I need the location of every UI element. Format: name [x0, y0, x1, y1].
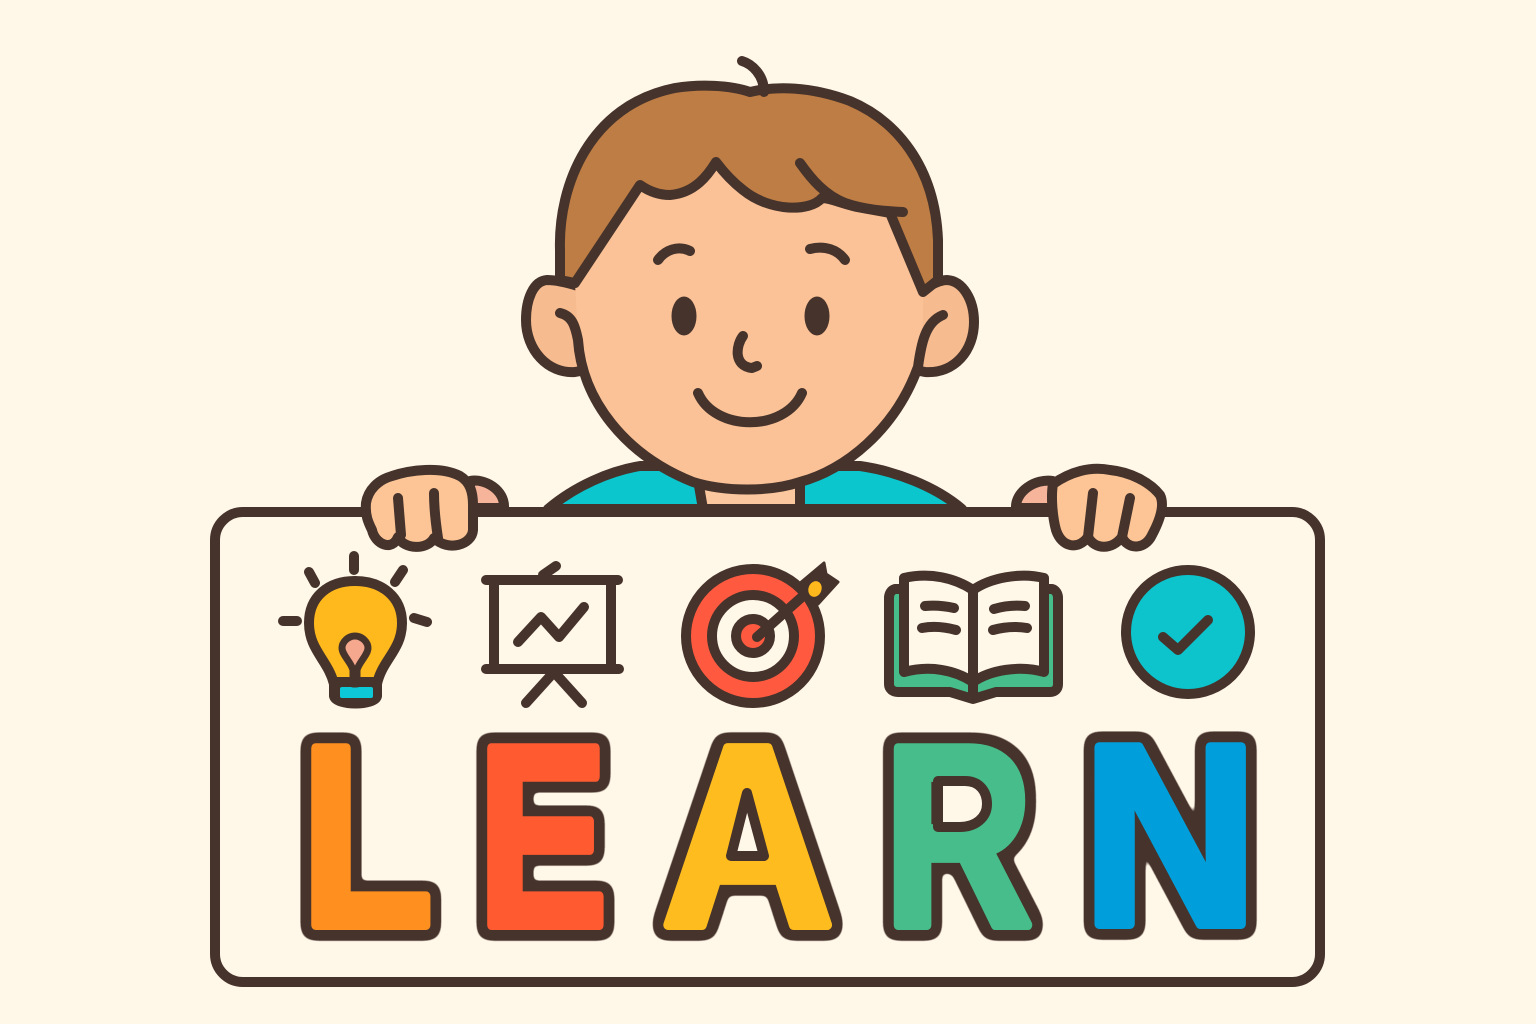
- letter N: N: [1083, 691, 1257, 979]
- icon: check circle: [1126, 570, 1250, 694]
- left eyebrow: [658, 248, 690, 260]
- R counter: [938, 781, 987, 827]
- left eye: [672, 296, 696, 336]
- icon: target with arrow: [686, 563, 838, 703]
- hair: [560, 86, 938, 292]
- letter A: A: [662, 693, 834, 980]
- letter R: R: [884, 693, 1032, 980]
- word: LEARN: [301, 691, 1257, 980]
- right eye: [804, 296, 830, 336]
- mouth: [698, 393, 802, 422]
- shirt: [548, 466, 962, 509]
- letter L: L: [301, 693, 433, 980]
- icon: light bulb: [283, 556, 427, 704]
- jaw and inner ear contour: [560, 313, 943, 490]
- letter E: E: [478, 694, 607, 980]
- nose: [738, 336, 757, 368]
- hair lock: [800, 163, 903, 212]
- hair curl: [742, 61, 764, 92]
- face: [575, 150, 923, 490]
- left hand: [366, 470, 504, 547]
- icon: open book: [889, 576, 1058, 699]
- right eyebrow: [810, 248, 845, 260]
- right ear: [915, 280, 974, 372]
- character: boy: [526, 61, 974, 509]
- left ear: [526, 280, 586, 372]
- icon: presentation board: [486, 566, 619, 703]
- sign board: [215, 512, 1320, 982]
- A counter: [731, 793, 764, 856]
- right hand: [1016, 469, 1162, 547]
